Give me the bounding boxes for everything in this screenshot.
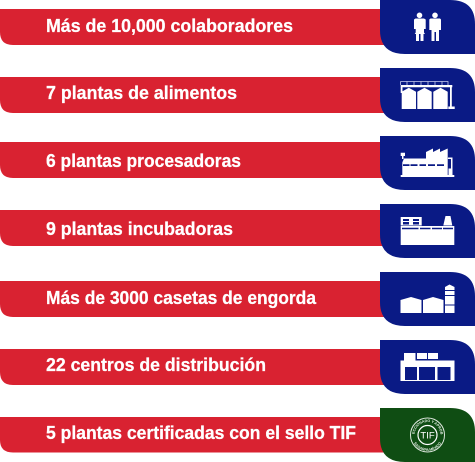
icon: silos [400, 82, 455, 109]
red bar: TIF [0, 417, 385, 452]
label: incubadoras: 9 plantas incubadoras [46, 219, 233, 239]
row: centros de distribucion [0, 340, 475, 394]
red bar: procesadoras [0, 142, 385, 178]
red bar: alimentos [0, 77, 385, 113]
blue tab: alimentos [380, 68, 475, 122]
red bar: distribucion [0, 349, 385, 385]
icon: TIF seal: SAGARPA MÉXICO [414, 442, 441, 451]
row: plantas de alimentos [0, 68, 475, 122]
icon: incubator building [401, 216, 454, 245]
red bar: incubadoras [0, 210, 385, 246]
blue tab: casetas [380, 272, 475, 326]
label: colaboradores: Más de 10,000 colaboradores [46, 16, 293, 36]
blue tab: colaboradores [380, 0, 475, 54]
label: procesadoras: 6 plantas procesadoras [46, 151, 241, 171]
row: colaboradores [0, 0, 475, 54]
green tab: TIF [380, 408, 475, 462]
icon: TIF seal: INSPECCIONADO Y APROBADO [412, 420, 443, 434]
icon: sheds and silo [400, 284, 454, 313]
blue tab: incubadoras [380, 204, 475, 258]
icon: two people [414, 12, 441, 41]
icon: TIF seal: TIF [420, 430, 435, 442]
row: plantas incubadoras [0, 204, 475, 258]
icon: distribution center [400, 353, 454, 381]
red bar: casetas [0, 281, 385, 317]
label: TIF: 5 plantas certificadas con el sello TIF [46, 423, 356, 443]
row: casetas de engorda [0, 272, 475, 326]
label: distribucion: 22 centros de distribución [46, 355, 266, 375]
label: casetas: Más de 3000 casetas de engorda [46, 288, 317, 308]
red bar: colaboradores [0, 9, 385, 45]
blue tab: procesadoras [380, 136, 475, 190]
label: alimentos: 7 plantas de alimentos [46, 83, 237, 103]
row: plantas procesadoras [0, 136, 475, 190]
blue tab: distribucion [380, 340, 475, 394]
icon: factory [401, 148, 454, 177]
